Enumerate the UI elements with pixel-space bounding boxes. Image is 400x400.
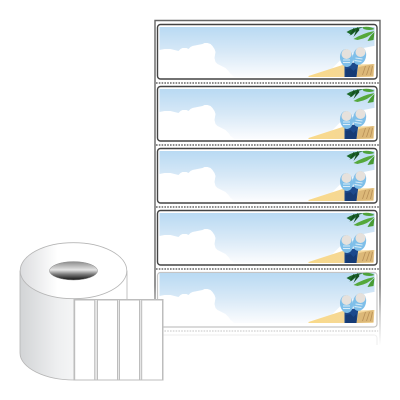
label sheet <box>155 20 380 365</box>
label 1 <box>158 24 377 79</box>
perforation 4 <box>156 268 379 270</box>
roll core hole <box>50 262 98 280</box>
strip label 1 <box>75 300 95 380</box>
perforation 3 <box>156 206 379 208</box>
perforation 1 <box>156 82 379 84</box>
roll top face <box>20 243 127 299</box>
perforation 5 <box>156 330 379 332</box>
strip label 2 <box>98 300 118 380</box>
label 3 <box>158 148 377 203</box>
label 5 <box>158 272 377 327</box>
roll body <box>20 271 127 380</box>
perforation 2 <box>156 144 379 146</box>
fade overlay <box>150 285 386 345</box>
strip label 4 <box>142 300 162 380</box>
label strip <box>74 300 163 380</box>
label 2 <box>158 86 377 141</box>
strip label 3 <box>120 300 140 380</box>
label 4 <box>158 210 377 265</box>
label 6 faded <box>158 335 377 365</box>
sheet outer border <box>155 20 380 352</box>
label roll <box>20 243 163 380</box>
